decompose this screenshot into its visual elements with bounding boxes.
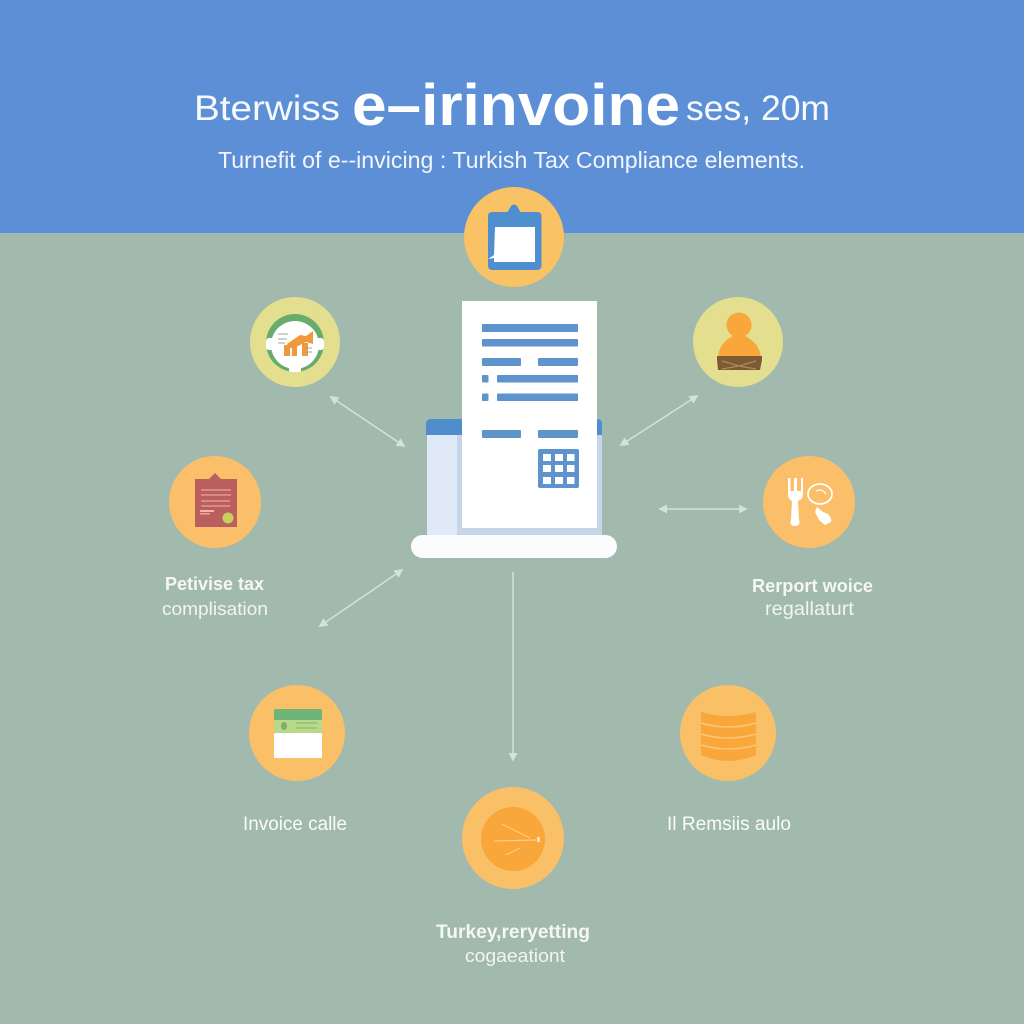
label: report voice [752,575,873,620]
arrow: lower-left [320,570,402,626]
label: invoice: Invoice calle [243,814,347,835]
title: ses, 20m [686,89,830,128]
title: Bterwiss [194,89,340,128]
arrow: top-right [621,396,697,445]
label: tax compilation: complisation [162,598,268,619]
arrow: right [660,508,746,510]
title: e–irinvoine [352,73,680,138]
label: report voice: regallaturt [765,599,855,620]
icon: invoice card circle [249,685,345,781]
label: Turkey reporting: cogaeationt [465,945,565,966]
label: Turkey reporting: Turkey,reryetting [436,922,590,943]
icon: fork and hand circle [763,456,855,548]
icon: growth chart circle [250,297,340,387]
title [194,73,830,138]
header band [0,0,1024,233]
text lines [482,324,578,438]
label: tax compilation: Petivise tax [165,574,264,594]
label: remittance: Il Remsiis aulo [667,814,791,835]
base [411,535,617,558]
label: tax compilation [162,574,268,619]
page background [0,233,1024,1024]
subtitle: Turnefit of e--invicing : Turkish Tax Compliance elements. [218,147,805,173]
calculator grid [538,449,579,488]
arrow: top-left [331,397,404,446]
icon: orange disc circle [462,787,564,889]
label: report voice: Rerport woice [752,575,873,596]
icon: stamp person circle [693,297,783,387]
icon: clipboard, top circle [464,187,564,287]
folder back [426,419,602,536]
arrow: down [512,572,514,760]
central invoice document [411,301,617,558]
paper sheet [462,301,597,528]
icon: tax document circle [169,456,261,548]
icon: database stack circle [680,685,776,781]
label: Turkey reporting [436,922,590,966]
